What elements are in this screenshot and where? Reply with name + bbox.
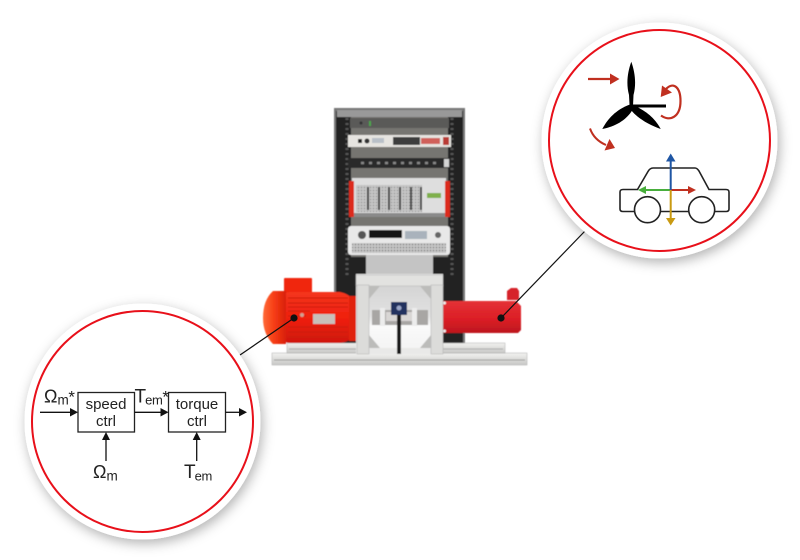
- label: measured speed: Ω: [93, 462, 106, 482]
- arrow: blade rotation: [590, 128, 615, 150]
- connector line: servo motor to application circle: [501, 231, 585, 318]
- label: speed reference: m: [57, 392, 68, 408]
- test bench photo: [263, 108, 527, 365]
- connector line: induction motor to control circle: [240, 318, 294, 355]
- label: speed reference: *: [68, 388, 75, 406]
- arrow: vertical axis up: [666, 154, 676, 190]
- icon: wind turbine: [602, 62, 666, 129]
- arrow: vertical axis down: [666, 190, 676, 226]
- label: torque reference: em: [145, 392, 162, 408]
- connector dot: induction motor: [290, 314, 298, 322]
- arrow: torque reference: [134, 408, 168, 416]
- label: speed reference: Ω: [44, 386, 57, 406]
- label: measured torque: T: [184, 462, 196, 483]
- dark connector unit: [348, 158, 451, 168]
- power analyser unit: [349, 178, 450, 217]
- induction motor: [263, 278, 357, 344]
- servo motor: [443, 288, 521, 333]
- panel: application emulation circle: [542, 22, 778, 258]
- block: speed controller: [78, 392, 134, 432]
- arrow: longitudinal axis forward: [671, 186, 696, 194]
- arrow: speed reference input: [40, 408, 78, 416]
- label: measured speed: m: [106, 468, 117, 484]
- panel: control loop circle: [24, 304, 260, 540]
- arrow: torque feedback: [193, 432, 201, 461]
- label: torque reference: *: [162, 388, 169, 406]
- block: speed controller: speed: [86, 396, 126, 413]
- connector dot: servo motor: [497, 314, 505, 322]
- arrow: wind direction: [588, 74, 620, 84]
- upper rail: [287, 343, 505, 353]
- block: torque controller: torque: [176, 396, 218, 413]
- arrow: shaft rotation: [661, 86, 680, 118]
- lower rail: [272, 353, 527, 365]
- block: torque controller: ctrl: [187, 413, 207, 430]
- label: torque reference: T: [134, 386, 146, 408]
- server rack: [334, 108, 465, 348]
- arrow: controller output: [226, 408, 247, 416]
- power supply unit: [348, 226, 450, 255]
- label: measured torque: em: [195, 468, 212, 484]
- block: torque controller: [168, 392, 226, 432]
- arrow: speed feedback: [102, 432, 110, 461]
- arrow: longitudinal axis rear: [638, 186, 671, 194]
- block: speed controller: ctrl: [96, 413, 116, 430]
- aluminium coupling frame: [356, 274, 443, 354]
- switch unit: [348, 135, 451, 147]
- icon: car: [620, 168, 729, 223]
- torque sensor: [391, 302, 407, 354]
